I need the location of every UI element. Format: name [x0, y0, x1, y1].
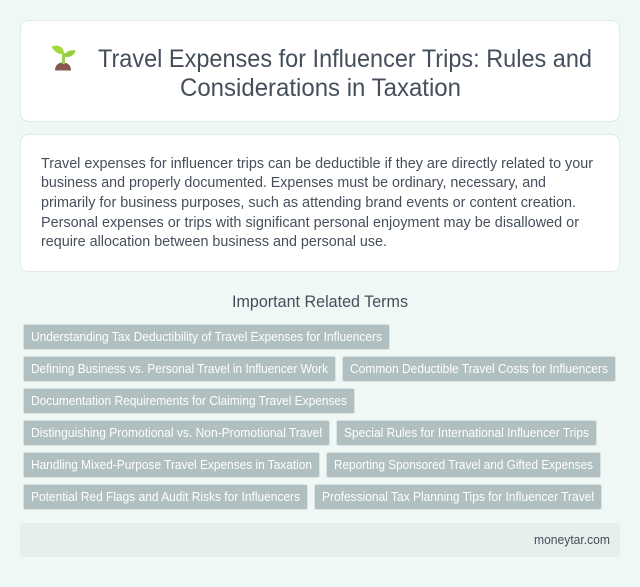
tag: documentation: Documentation Requirements for Claiming Travel Expenses — [31, 394, 347, 408]
tag: documentation — [24, 388, 354, 414]
tag: red flags: Potential Red Flags and Audit Risks for Influencers — [31, 490, 300, 504]
tag: business vs personal: Defining Business vs. Personal Travel in Influencer Work — [31, 362, 329, 376]
tag list — [24, 324, 616, 510]
text block: description: business and properly documented. Expenses must be ordinary, necessary, and — [41, 174, 546, 191]
tag: business vs personal — [24, 356, 336, 382]
text block: description — [41, 155, 593, 250]
text block: description: require allocation between business and personal use. — [41, 233, 387, 250]
tag: international trips — [336, 420, 596, 446]
text block: description: Personal expenses or trips with significant personal enjoyment may be disallowed or — [41, 214, 579, 231]
tag: promotional travel: Distinguishing Promotional vs. Non-Promotional Travel — [31, 426, 322, 440]
panel: title card — [20, 20, 620, 122]
icon: seedling — [52, 46, 76, 70]
tag: red flags — [24, 484, 308, 510]
title: Travel Expenses for Influencer Trips: Rules and — [98, 45, 592, 73]
tag: common costs: Common Deductible Travel Costs for Influencers — [350, 362, 608, 376]
text block: description: Travel expenses for influencer trips can be deductible if they are directly related to your — [41, 155, 593, 172]
panel: description card — [20, 134, 620, 272]
tag: mixed purpose: Handling Mixed-Purpose Travel Expenses in Taxation — [31, 458, 312, 472]
tag: sponsored travel: Reporting Sponsored Travel and Gifted Expenses — [334, 458, 593, 472]
tag: tax deductibility — [24, 324, 390, 350]
tag: planning tips — [314, 484, 602, 510]
tag: mixed purpose — [24, 452, 320, 478]
tag: tax deductibility: Understanding Tax Deductibility of Travel Expenses for Influencers — [31, 330, 382, 344]
footer: moneytar.com — [534, 533, 610, 547]
heading: related terms: Important Related Terms — [232, 293, 408, 311]
title: Considerations in Taxation — [180, 74, 461, 102]
text block: description: primarily for business purposes, such as attending brand events or content creation. — [41, 194, 576, 211]
tag: promotional travel — [24, 420, 330, 446]
tag: common costs — [342, 356, 616, 382]
tag: sponsored travel — [326, 452, 600, 478]
tag: international trips: Special Rules for International Influencer Trips — [344, 426, 589, 440]
footer — [20, 523, 620, 557]
tag: planning tips: Professional Tax Planning Tips for Influencer Travel — [322, 490, 594, 504]
title — [98, 45, 592, 102]
